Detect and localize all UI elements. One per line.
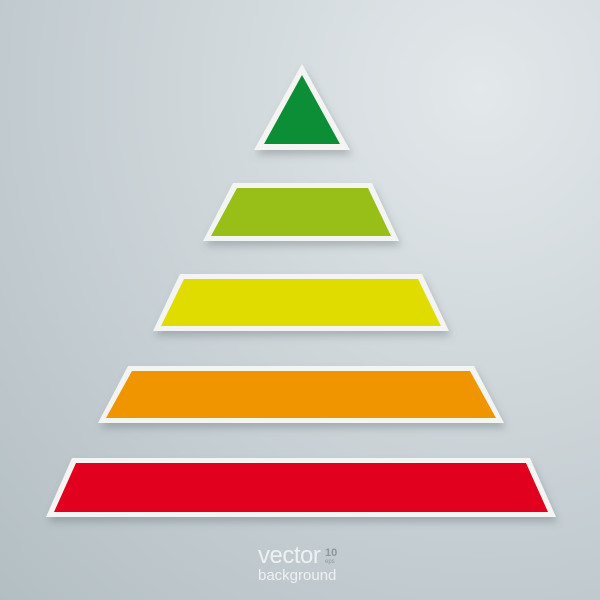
level 2: lime bar	[203, 183, 399, 241]
level 5: red bar	[46, 458, 556, 517]
level 4: orange bar	[98, 366, 504, 423]
level 3: yellow bar	[153, 274, 449, 331]
10 eps: 10	[325, 547, 337, 559]
level 1: green triangle	[254, 64, 350, 150]
watermark text	[258, 542, 337, 584]
background word: background	[258, 567, 336, 584]
10 eps: eps	[325, 559, 335, 565]
10 eps	[325, 547, 337, 565]
vector word: vector	[258, 542, 320, 569]
